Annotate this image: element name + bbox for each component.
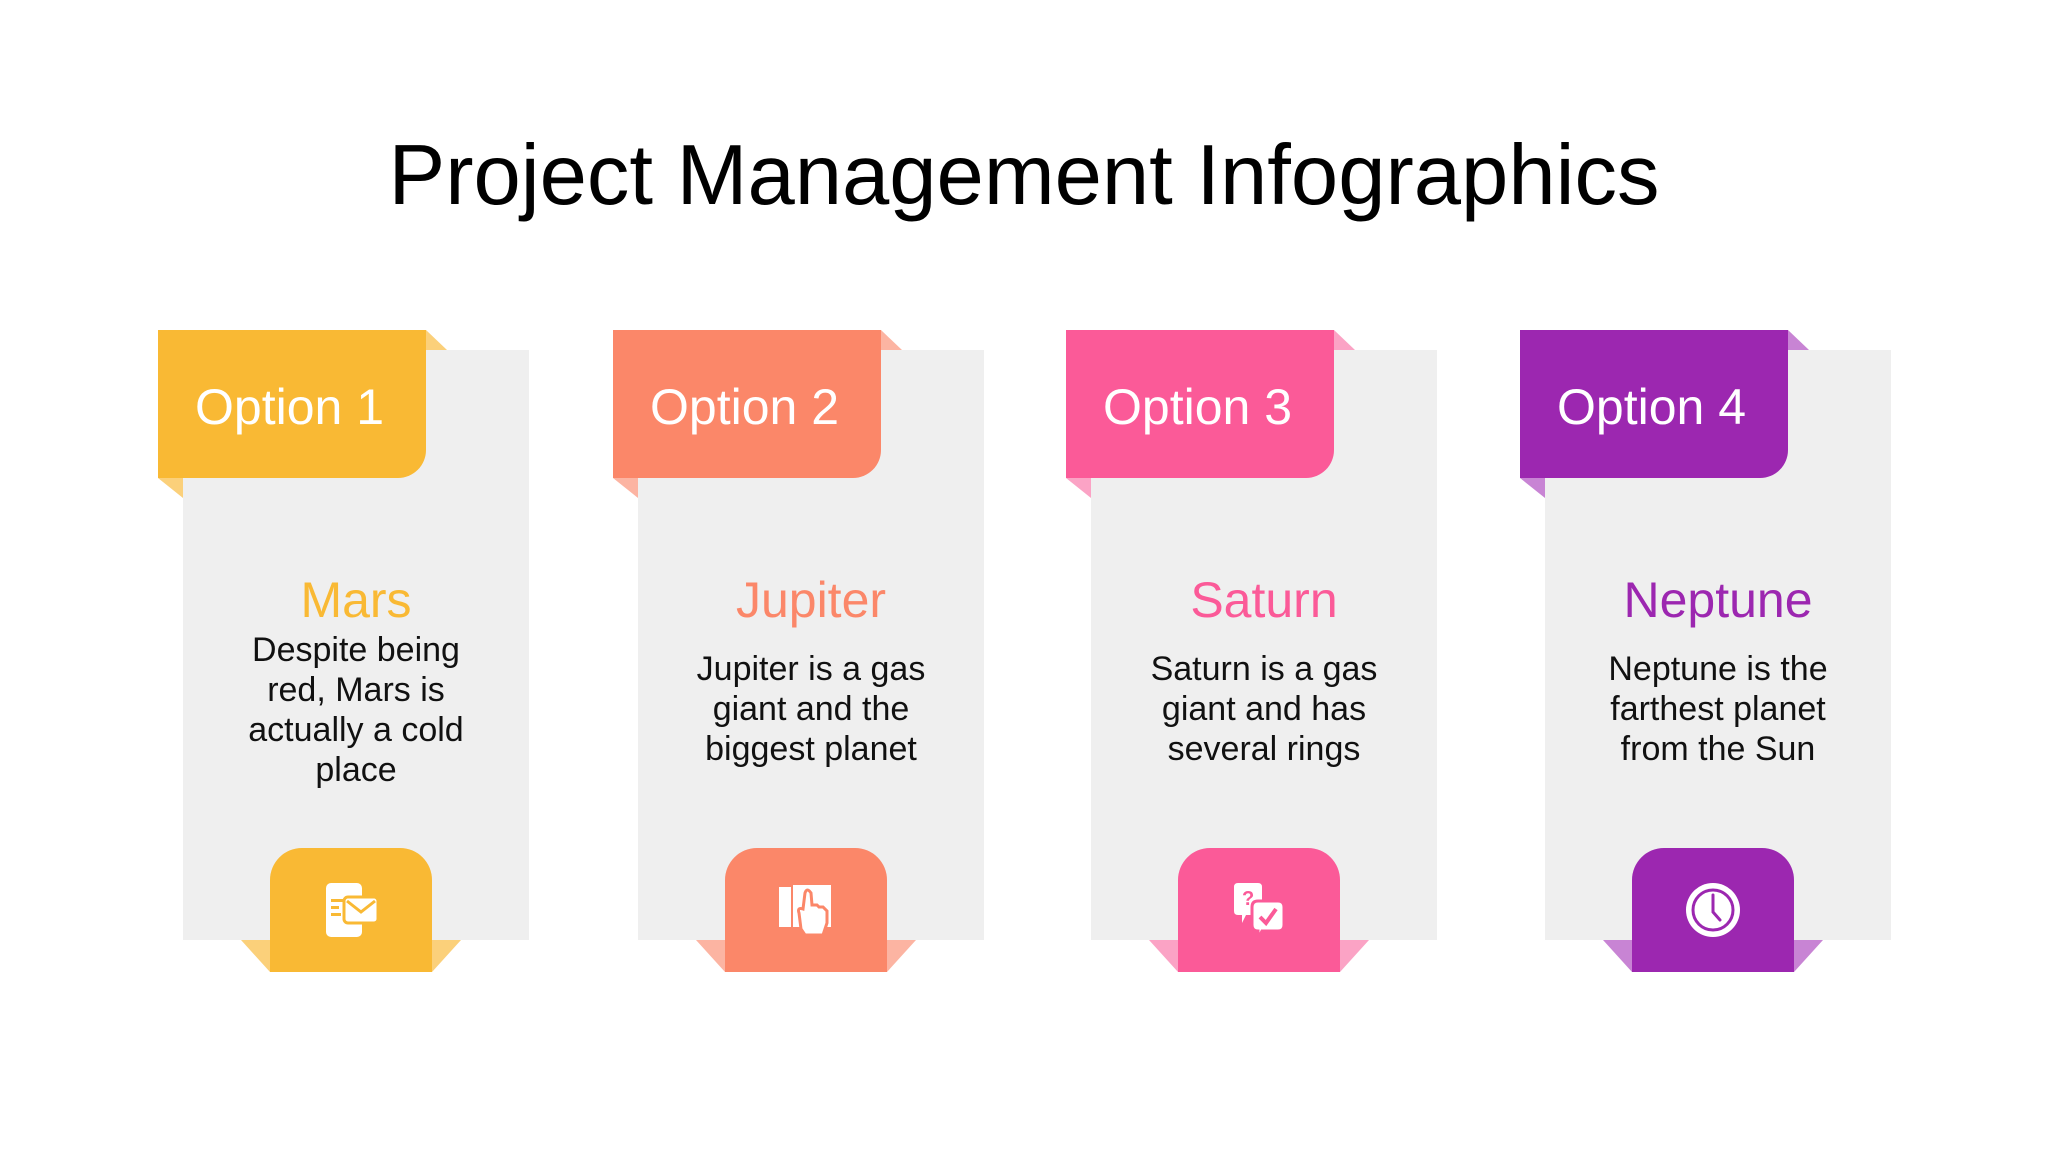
card: option 2 — [613, 330, 984, 972]
title: Project Management Infographics — [388, 128, 1659, 223]
text: Jupiter: Jupiter — [736, 572, 886, 628]
tab: option 3 — [1066, 330, 1334, 478]
text: Mars: Despite being — [252, 631, 460, 669]
text: Saturn: Saturn is a gas — [1151, 650, 1377, 688]
text: Mars: red, Mars is — [267, 671, 445, 709]
text: Neptune: from the Sun — [1621, 730, 1815, 768]
card: option 1 — [158, 330, 529, 972]
text: Jupiter: biggest planet — [705, 730, 917, 768]
panel background — [1091, 350, 1437, 940]
icon: book hand — [725, 848, 887, 972]
folds — [1066, 330, 1369, 972]
panel background — [183, 350, 529, 940]
tab: option 2 — [613, 330, 881, 478]
tab: option 1: Option 1 — [195, 379, 384, 435]
text: Neptune: Neptune is the — [1608, 650, 1828, 688]
icon: chat bubbles — [1178, 848, 1340, 972]
folds — [158, 330, 461, 972]
text: Jupiter: giant and the — [713, 690, 909, 728]
text: Saturn — [1151, 572, 1377, 768]
card: option 3 — [1066, 330, 1437, 972]
text: Mars: place — [315, 751, 397, 789]
text: Jupiter — [697, 572, 925, 768]
text: Neptune: farthest planet — [1610, 690, 1826, 728]
text: Neptune: Neptune — [1623, 572, 1813, 628]
panel background — [638, 350, 984, 940]
text: Saturn: giant and has — [1162, 690, 1366, 728]
tab: option 2: Option 2 — [650, 379, 839, 435]
icon: chat bubbles: ? — [1242, 888, 1254, 910]
text: Saturn: several rings — [1168, 730, 1360, 768]
text: Jupiter: Jupiter is a gas — [697, 650, 925, 688]
folds — [1520, 330, 1823, 972]
folds — [613, 330, 916, 972]
tab: option 4 — [1520, 330, 1788, 478]
icon: clock — [1632, 848, 1794, 972]
tab: option 1 — [158, 330, 426, 478]
tab: option 4: Option 4 — [1557, 379, 1746, 435]
card: option 4 — [1520, 330, 1891, 972]
text: Neptune — [1608, 572, 1828, 768]
tab: option 3: Option 3 — [1103, 379, 1292, 435]
text: Mars: Mars — [300, 572, 412, 628]
text: Saturn: Saturn — [1190, 572, 1338, 628]
panel background — [1545, 350, 1891, 940]
icon: phone mail — [270, 848, 432, 972]
text: Mars: actually a cold — [248, 711, 464, 749]
text: Mars — [248, 572, 464, 789]
